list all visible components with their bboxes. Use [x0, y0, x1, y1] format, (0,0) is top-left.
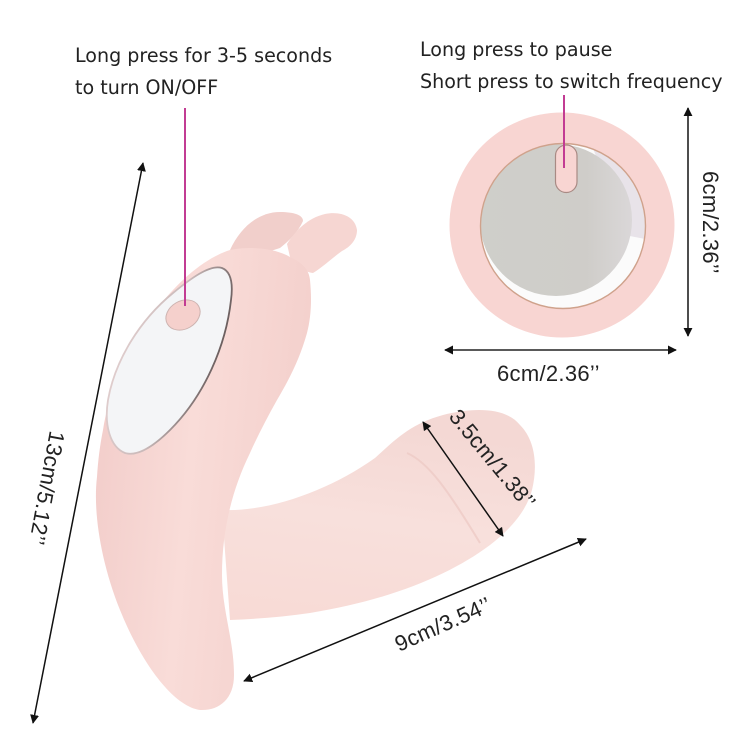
arrow: remote width: [445, 349, 676, 351]
label: tip diameter: 3.5cm/1.38’’: [444, 404, 541, 514]
text: remote instruction: Short press to switch frequency: [420, 70, 723, 93]
label: remote width: 6cm/2.36’’: [497, 361, 600, 386]
text: power button instruction: Long press for 3-5 seconds: [75, 44, 332, 67]
label: total length: 13cm/5.12’’: [24, 429, 70, 547]
label: insert length: 9cm/3.54’’: [391, 592, 495, 657]
power button: [160, 294, 206, 336]
remote control disc: [450, 112, 674, 338]
callout line: remote button: [563, 95, 565, 168]
text: power button instruction: to turn ON/OFF: [75, 76, 218, 99]
arrow: insert length: [244, 539, 586, 681]
callout line: power button: [184, 108, 186, 306]
arrow: remote height: [687, 108, 689, 336]
product shaft section: [222, 410, 535, 620]
product ridge detail: [407, 453, 480, 543]
label: remote height: 6cm/2.36’’: [698, 171, 723, 274]
mirror panel: [107, 267, 232, 454]
product ears: [230, 212, 357, 273]
arrow: total length: [33, 163, 143, 723]
arrow: tip diameter: [423, 422, 503, 536]
text: remote instruction: Long press to pause: [420, 38, 612, 61]
product main body: [96, 248, 311, 710]
